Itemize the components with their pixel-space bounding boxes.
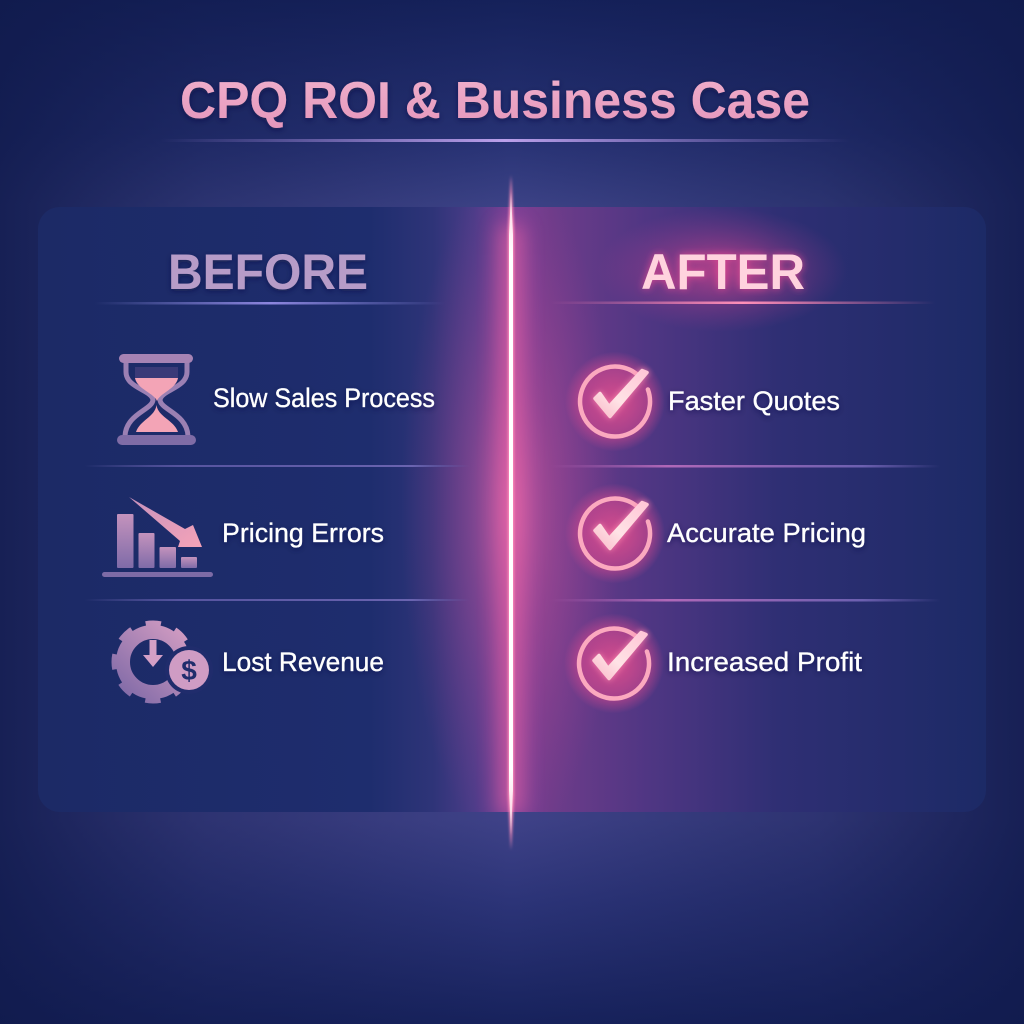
label: slow sales process: Slow Sales Process [213, 383, 435, 413]
title underline [160, 139, 850, 142]
label: pricing errors: Pricing Errors [222, 518, 384, 548]
row divider [85, 599, 470, 601]
label: faster quotes: Faster Quotes [668, 386, 840, 416]
center glowing divider [508, 175, 514, 850]
icon: gear with dollar: $ [181, 655, 197, 686]
title: CPQ ROI & Business Case [180, 72, 810, 130]
icon: hourglass [117, 354, 196, 445]
label: increased profit: Increased Profit [667, 647, 863, 677]
icon: check faster quotes [565, 352, 665, 452]
row divider [550, 465, 940, 468]
heading: before: BEFORE [168, 244, 368, 300]
row divider [550, 599, 940, 602]
icon: check accurate pricing [565, 484, 665, 584]
row divider [85, 465, 470, 467]
icon: gear with dollar [115, 624, 213, 700]
heading underline: after [550, 302, 935, 304]
heading: after: AFTER [641, 244, 805, 300]
label: accurate pricing: Accurate Pricing [667, 518, 866, 548]
heading underline: before [95, 302, 445, 304]
icon: check increased profit [564, 614, 664, 714]
label: lost revenue: Lost Revenue [222, 647, 384, 677]
panel: comparison card [38, 207, 986, 812]
icon: falling bar chart [102, 497, 213, 577]
